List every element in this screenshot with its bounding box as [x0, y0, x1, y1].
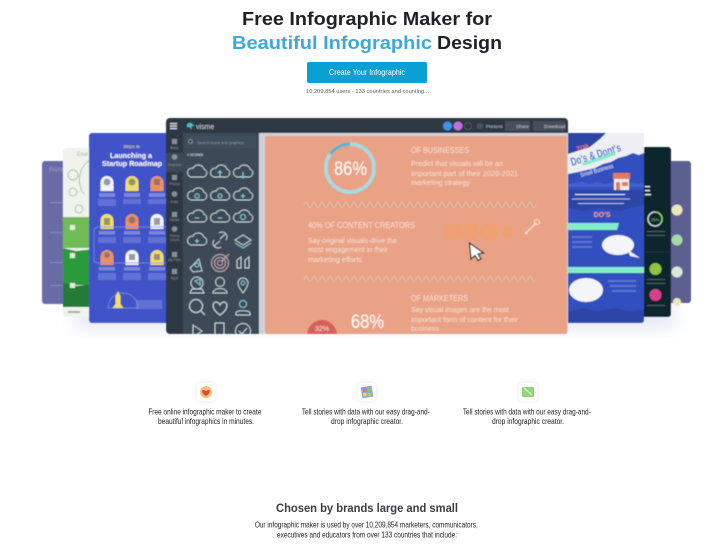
statistic: content creators: marketing efforts — [308, 257, 363, 264]
editor left rail: Apps — [171, 276, 179, 280]
template: green left: Envi — [77, 152, 88, 158]
section heading: Chosen by brands large and small — [276, 503, 458, 515]
title — [232, 8, 502, 53]
statistic: businesses: Predict that visuals will be an — [411, 161, 503, 168]
feature: data stories: drop infographic creator. — [331, 416, 403, 426]
statistic: marketers: important form of content for their — [411, 317, 519, 324]
statistic: businesses: important part of their 2020-2021 — [411, 171, 518, 178]
template: blue do's and don'ts: Do's & Dont's — [569, 142, 623, 169]
user count caption: 10,209,854 users - 133 countries and counting... — [306, 89, 429, 95]
donut: 86% — [326, 144, 374, 192]
design canvas — [265, 136, 567, 350]
hero: editor mockup and template fan — [42, 118, 691, 350]
feature: infographic maker: Free online infographic maker to create — [148, 406, 262, 416]
editor left rail: Theme — [169, 234, 180, 238]
statistic: marketers: OF MARKETERS — [411, 294, 468, 303]
feature: infographic maker: beautiful infographics in minutes. — [158, 416, 254, 426]
icon: heart badge — [197, 383, 215, 401]
editor top bar: Present — [486, 124, 503, 130]
call to action button — [307, 62, 427, 83]
icons: targets and wand — [444, 220, 540, 240]
editor top bar: Share — [516, 124, 529, 130]
donut: 86%: 86% — [334, 158, 367, 180]
statistic: businesses — [411, 146, 518, 187]
template: blue do's and don'ts: DO'S — [594, 212, 611, 219]
editor left rail — [166, 133, 183, 334]
statistic: businesses: marketing strategy — [411, 180, 470, 187]
template: blue startup roadmap — [89, 133, 169, 323]
feature: drag and drop: drop infographic creator. — [492, 416, 564, 426]
statistic: businesses: OF BUSINESSES — [411, 146, 469, 155]
feature: drag and drop: Tell stories with data with our easy drag-and- — [463, 406, 591, 416]
statistic: content creators: most engagement in their — [308, 247, 389, 254]
section description: Our infographic maker is used by over 10,209,854 marketers, communicators, — [255, 520, 478, 530]
template: blue startup roadmap: Startup Roadmap — [102, 161, 162, 168]
section description: executives and educators from over 133 countries that include: — [277, 530, 457, 540]
statistic: marketers: business — [411, 326, 439, 333]
editor left rail: Basic — [170, 146, 179, 150]
call to action button: Create Your Infographic — [329, 67, 406, 77]
statistic: content creators: 40% OF CONTENT CREATORS — [308, 221, 415, 230]
editor icon panel: < ICONS — [187, 152, 203, 157]
hero shadow — [75, 305, 675, 327]
editor left rail: Graphics — [168, 163, 182, 167]
feature: data stories — [302, 383, 432, 426]
template: purple back right — [660, 161, 691, 306]
template: purple back left — [42, 161, 82, 304]
badge: 32% — [306, 320, 338, 334]
editor top bar: Download — [544, 124, 566, 130]
icon: cursor — [470, 243, 484, 260]
logo — [187, 123, 214, 131]
feature: drag and drop — [463, 383, 593, 426]
statistic: content creators — [308, 221, 415, 264]
title: Design — [437, 32, 502, 53]
template: dark right: 25% — [651, 217, 659, 222]
template: blue startup roadmap: Steps to — [123, 144, 140, 149]
title: Free Infographic Maker for — [242, 8, 492, 29]
template: purple back left: PAPER — [49, 168, 70, 174]
editor left rail: Colors — [170, 238, 180, 242]
editor icon panel — [183, 133, 259, 338]
template: blue startup roadmap: Launching a — [110, 153, 152, 160]
statistic: content creators: Say original visuals drive the — [308, 238, 397, 245]
feature: data stories: Tell stories with data with our easy drag-and- — [302, 406, 430, 416]
statistic: marketers: Say visual images are the most — [411, 307, 509, 314]
statistic: marketers — [411, 294, 519, 333]
logo: visme — [196, 124, 214, 131]
template: blue do's and don'ts: Small Business — [580, 164, 614, 179]
badge: 32%: 32% — [315, 326, 329, 333]
editor left rail: Photos — [169, 182, 180, 186]
editor icon panel: Search icons and graphics — [197, 140, 244, 145]
icon: green pencil — [519, 383, 537, 401]
editor left rail: Media — [170, 218, 179, 222]
editor top bar — [166, 118, 568, 133]
icon: storefront — [613, 173, 630, 190]
editor left rail: Data — [171, 200, 178, 204]
editor left rail: My Files — [168, 258, 181, 262]
template: green left — [63, 148, 103, 317]
statistic: 68%: 68% — [351, 311, 384, 333]
feature: infographic maker — [148, 383, 264, 426]
template: blue do's and don'ts: TOP — [576, 144, 589, 153]
icon: menu — [170, 123, 177, 129]
template: dark right — [630, 147, 671, 317]
title: Beautiful Infographic — [232, 32, 432, 53]
template: blue do's and don'ts — [560, 133, 644, 325]
editor window — [166, 118, 568, 350]
icon: color tiles — [358, 383, 376, 401]
